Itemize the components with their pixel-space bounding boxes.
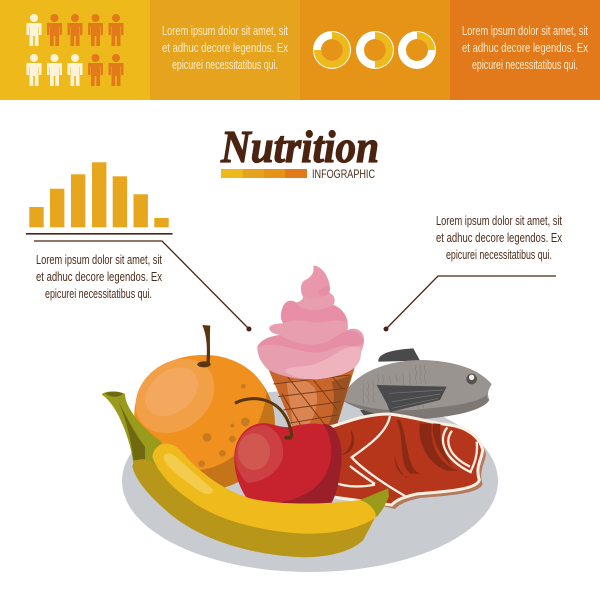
icon: orange: [121, 325, 275, 490]
text block: left: et adhuc decore legendos. Ex: [36, 269, 162, 284]
text block: right: epicurei necessitatibus qui.: [446, 247, 552, 262]
title: Nutrition: [220, 121, 379, 172]
text block: left: Lorem ipsum dolor sit amet, sit: [36, 252, 162, 267]
panel: top text one: Lorem ipsum dolor sit amet, sit: [162, 23, 288, 38]
panel: people pictogram: [0, 0, 150, 100]
bar chart: [26, 162, 172, 235]
text block: left: epicurei necessitatibus qui.: [45, 286, 152, 301]
panel: top text one: et adhuc decore legendos. Ex: [162, 40, 288, 55]
icon: apple: [234, 399, 342, 505]
text block: left: [36, 252, 162, 301]
icon: fish: [342, 348, 492, 419]
panel: donut charts: [300, 0, 450, 100]
panel: top text one: [150, 0, 300, 100]
icon: meat steak: [330, 414, 486, 509]
text block: right: [436, 213, 562, 262]
panel: top text one: epicurei necessitatibus qui.: [172, 57, 278, 72]
scoop: [257, 266, 364, 379]
icon: banana: [102, 392, 389, 557]
panel: top text two: [450, 0, 600, 100]
title: INFOGRAPHIC: [312, 167, 375, 181]
icon: ice cream cone: [257, 266, 364, 428]
plate: [122, 390, 498, 572]
cone: [267, 367, 355, 428]
orange stem: [202, 325, 210, 363]
callout line: left: [34, 241, 252, 332]
apple stem: [235, 399, 292, 437]
callout line: right: [384, 276, 556, 332]
